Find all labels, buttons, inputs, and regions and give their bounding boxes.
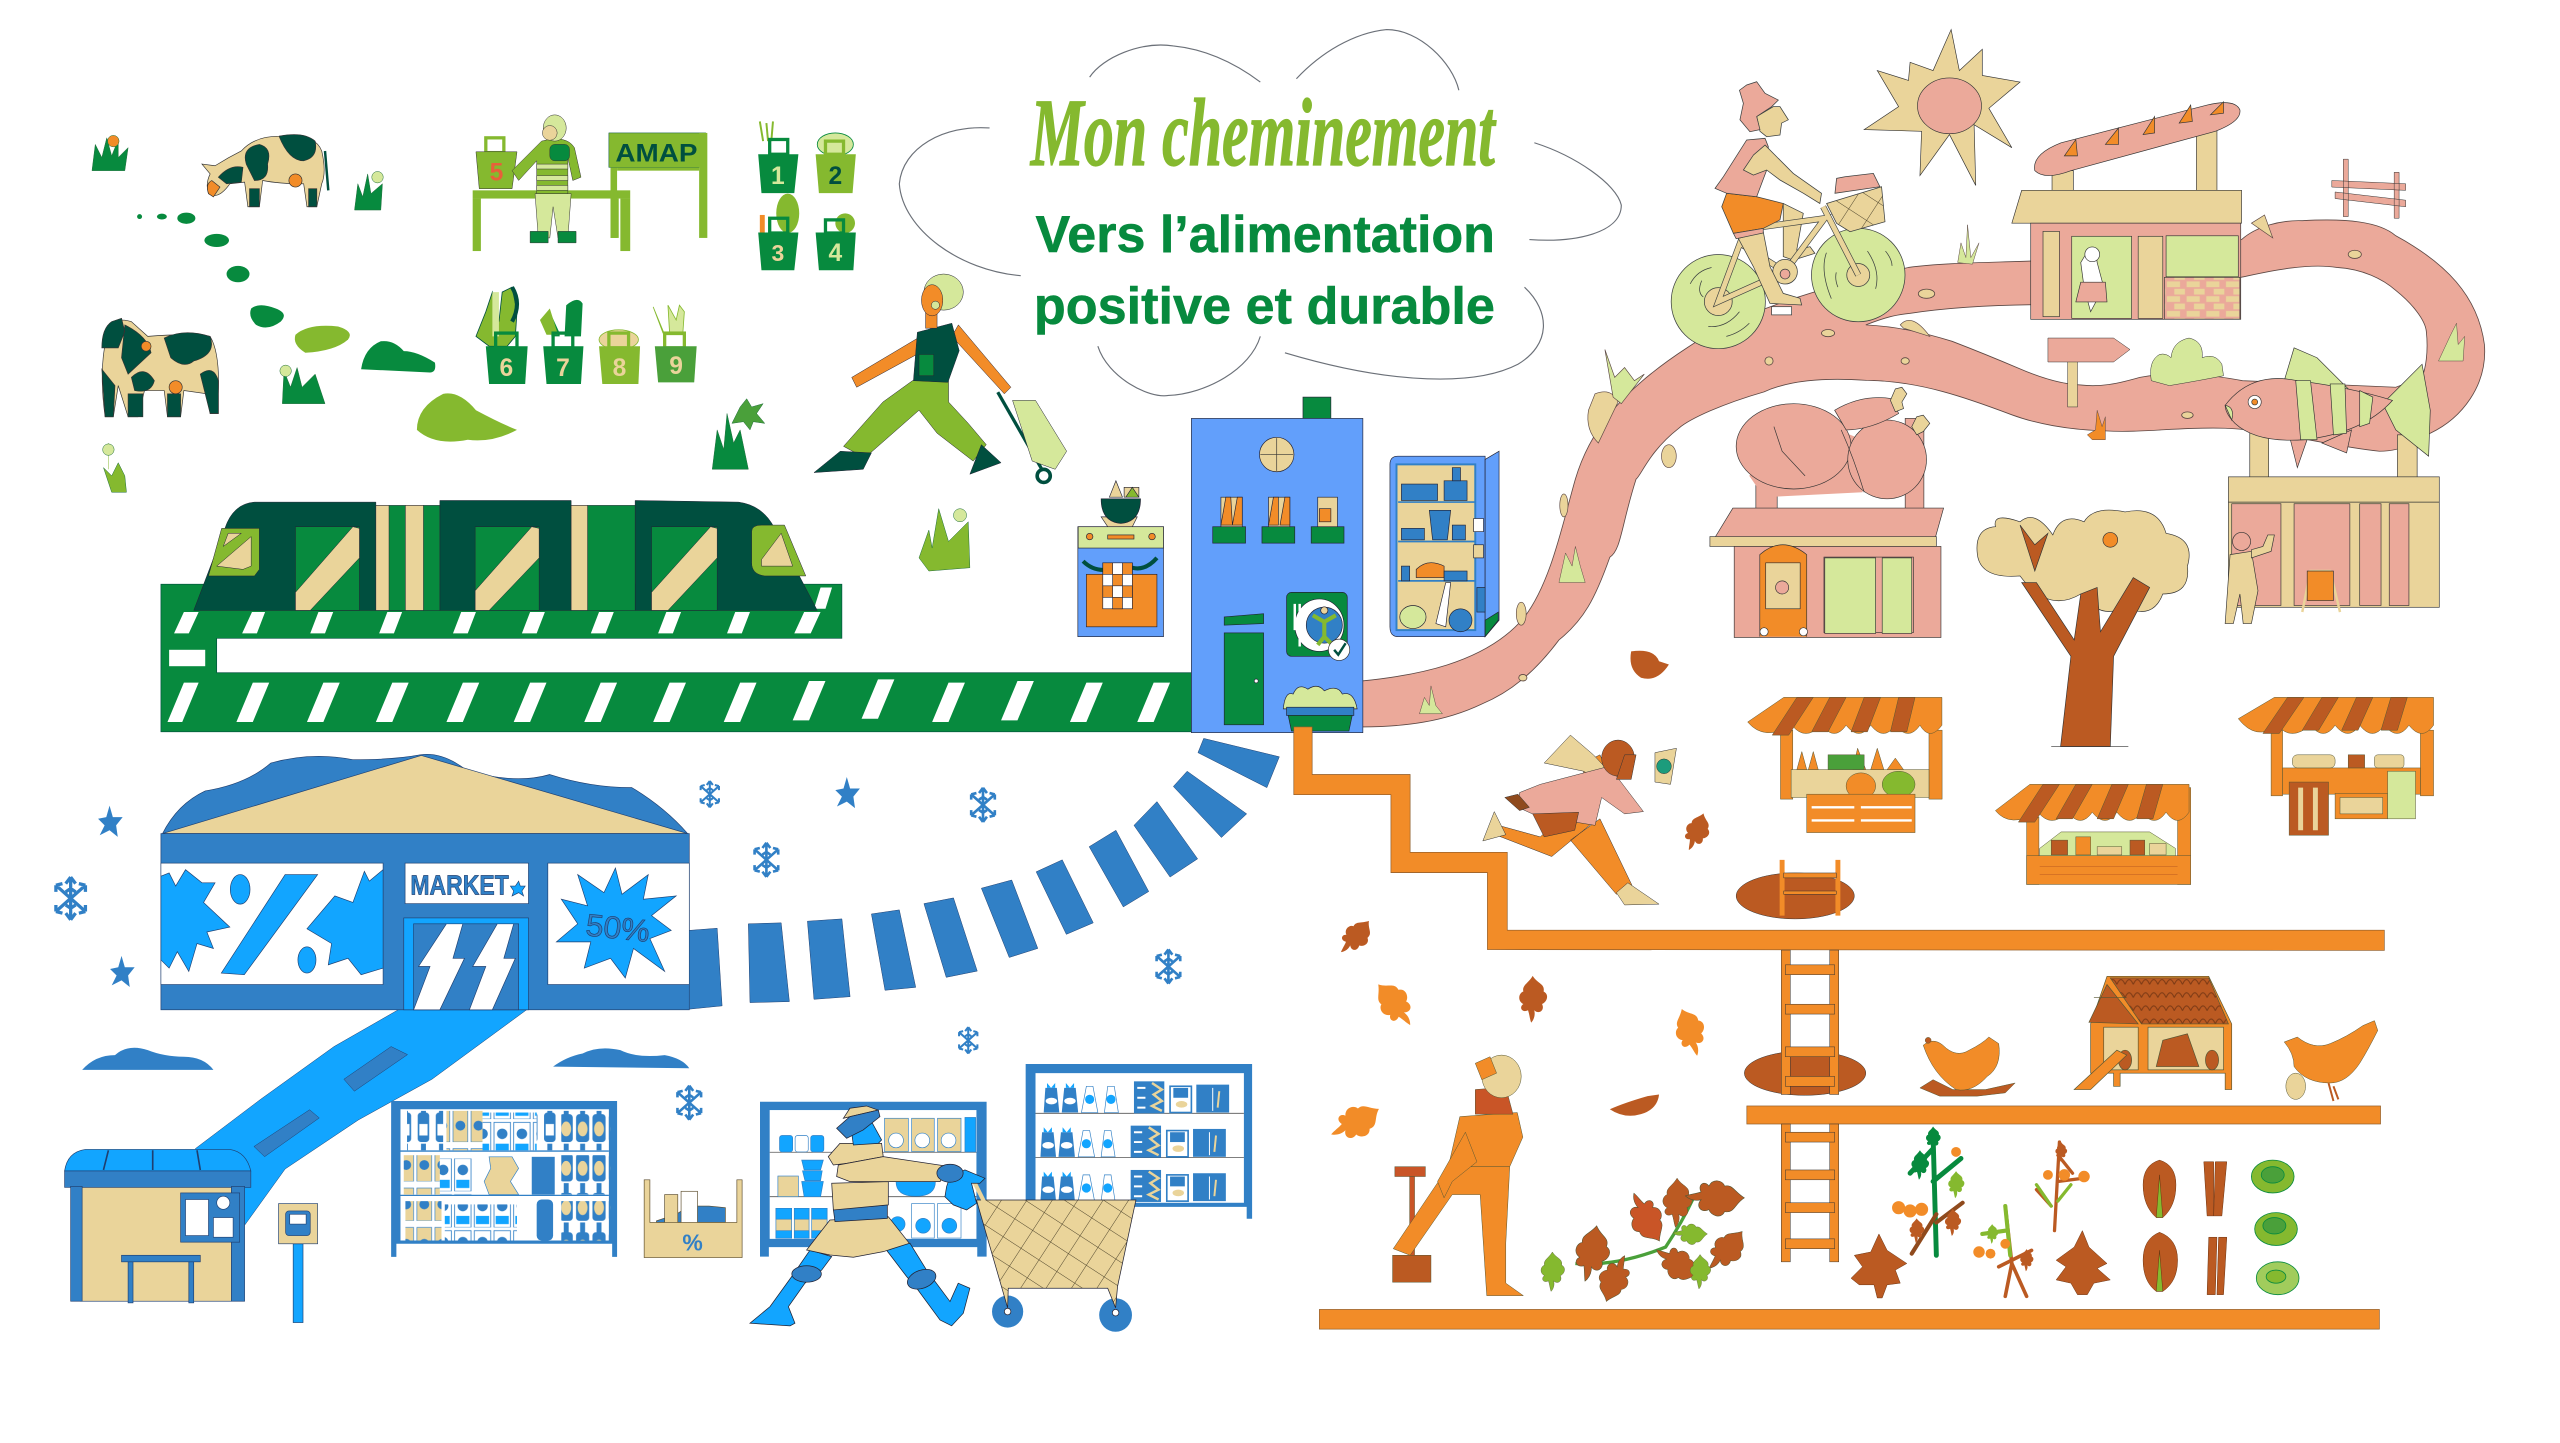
shopper with cart [750,1106,1136,1332]
doors [404,918,528,1010]
road to bus stop [195,1009,527,1226]
right window: 50% [584,907,651,949]
door [1224,614,1264,725]
bottom shelf [1319,1309,2379,1329]
middle shelf [1747,1106,2381,1124]
title: positive et durable [1034,276,1495,334]
leeks [2204,1162,2227,1295]
icon: grass with pale flower [355,171,383,210]
title: Mon cheminement [1029,80,1497,187]
panel: tram and track [161,500,1191,732]
falling autumn leaves [1324,810,1715,1150]
rider front leg [1738,232,1802,305]
left leg [750,1250,832,1326]
upper windows [1213,497,1344,543]
fridge [1390,451,1499,637]
bag 4: 4 [828,240,842,267]
front wheel [1811,228,1905,322]
discount box: % [682,1229,703,1255]
coat [807,1143,950,1257]
bag 3 [758,194,799,270]
bag 3: 3 [771,240,784,266]
rider head [1739,82,1788,137]
tram [194,500,817,610]
hen on nest [1920,1037,2015,1096]
icon: fence [2332,159,2406,218]
bag 2: 2 [828,163,842,190]
icon: loose leaf by road [1630,651,1669,679]
left window [161,863,383,985]
market stall 2 [1995,784,2191,884]
frame [1718,207,1858,302]
shelf 3 [1026,1064,1252,1219]
chimney [1303,397,1331,422]
bag 8: 8 [613,355,626,382]
shop visitor [2225,532,2274,624]
upper sleepers [174,612,821,633]
blue crossing stripes [689,738,1279,1009]
bag 6 [476,287,528,384]
AMAP sign [609,133,707,238]
head [837,1106,882,1145]
walking shopper with trolley [814,274,1067,482]
bus shelter [65,1149,251,1303]
stepping stones [137,213,517,442]
icon: signpost [2048,338,2130,407]
rider arm [1743,145,1821,203]
market stall 1 [1748,697,1942,833]
rider shorts [1722,193,1783,233]
running woman [1483,735,1676,905]
icon: grass with orange flower [92,135,128,171]
gardener with shovel [1393,1055,1523,1296]
sandwich board [2302,571,2340,612]
panel: discount supermarket [161,754,689,1010]
bag 7 [540,300,583,384]
market sign: MARKET [410,869,509,900]
roof [163,754,688,834]
bag 5 [476,138,517,189]
facade [1191,418,1363,733]
panel: cloud title bubble [899,30,1621,396]
panel: salmon road [1362,220,2485,727]
title [1029,80,1497,334]
right window [548,863,689,985]
cart [973,1180,1136,1332]
bags 1 to 4 [758,121,856,270]
panel: AMAP stand [473,115,707,251]
table [473,190,630,251]
planter [1283,686,1357,731]
lower sleepers [167,679,1170,722]
icon: spiky flower [712,399,765,469]
discount box [644,1180,742,1258]
stove cabinet [1078,481,1163,637]
icon: roadside shrubs [1516,215,2273,625]
bench [122,1255,200,1303]
panel: bakery with baguette [2012,102,2242,319]
bag 7: 7 [556,355,570,382]
bag 6: 6 [499,355,513,382]
panel: bicycle and rider [1671,82,1905,349]
orange stairs [1294,727,2384,950]
track gap marker [169,650,205,666]
hen and egg [2284,1021,2378,1101]
icon: road grass tufts [1419,225,2465,714]
panel: fish shop [2225,348,2439,624]
bag 5: 5 [490,159,503,186]
AMAP sign: AMAP [615,141,697,168]
panel: butcher shop with chicken [1710,387,1944,637]
carrots [1851,1231,2110,1298]
icon: grass bottom left [103,443,126,492]
pumpkin vine [1541,1178,1754,1306]
pebbles [1519,250,2361,681]
tree [1977,510,2189,747]
glove [937,1164,985,1210]
rider torso [1715,138,1768,197]
bags 6 to 9 [476,287,697,384]
ladder 2 and manhole [1744,950,1866,1095]
bag 9 [653,305,697,382]
icon: grass with pale flower near tram [919,509,970,571]
icon: grass with flower near stones [280,365,325,404]
basket [1827,173,1885,232]
rider back leg [1783,203,1815,260]
icon: sun [1864,30,2020,185]
facade [161,834,689,1010]
snowflakes and stars [56,777,1180,1120]
title: Vers l’alimentation [1036,205,1495,263]
bag 4 [816,213,856,270]
bag 1 [758,121,798,193]
bag 2 [816,133,856,193]
round window [1259,437,1294,472]
label logo [1287,592,1350,660]
chicken coop [2074,976,2232,1090]
roast chicken [1736,387,1930,499]
panel: building with fridge and stove [1078,397,1499,733]
fish [2225,348,2430,468]
market stall 3 [2238,697,2434,835]
farmer [512,115,581,243]
bag 1: 1 [771,163,785,190]
tomato plants [1892,1126,2090,1296]
manhole and ladder 1 [1736,860,1854,919]
blue clouds [82,1048,689,1070]
poster [181,1193,240,1242]
icon: front cow [102,318,219,417]
bag 8 [599,330,640,384]
lettuces [2143,1160,2178,1291]
right leg [885,1243,970,1326]
bus stop sign [279,1204,318,1323]
icon: grazing cow [202,135,328,207]
cabbages [2251,1160,2299,1295]
rear wheel [1671,255,1765,349]
icon: bush [2151,338,2224,386]
shelf 1 [391,1101,617,1257]
bag 9: 9 [669,353,683,380]
track [161,584,1191,732]
ladder 3 [1781,1124,1839,1262]
shelf 2 [760,1102,987,1257]
